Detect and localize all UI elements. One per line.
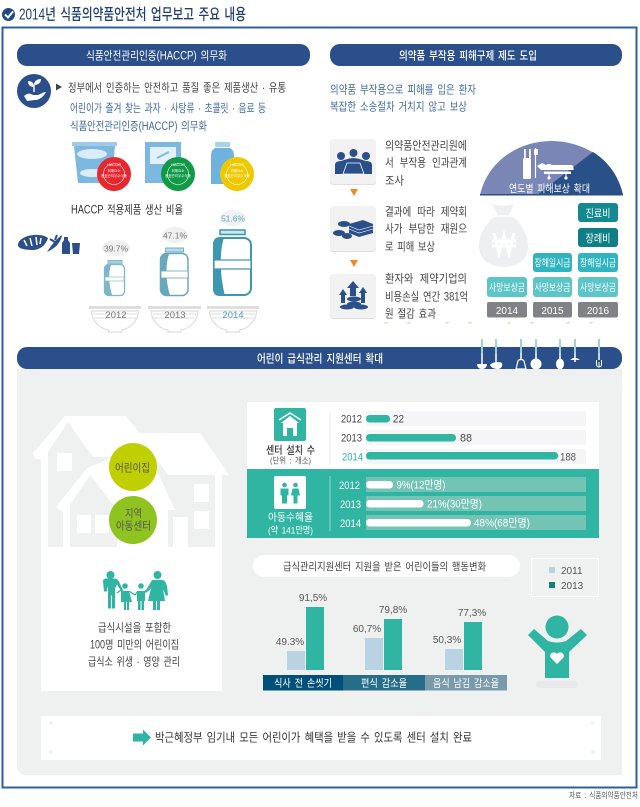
icon: bread, wheat, bottle, cup [18,235,80,254]
step 2 text: 결과에 따라 제약회 [385,204,467,218]
step 2 text: 로 피해 보상 [385,240,435,254]
column 2015: 장해일시금 [534,256,570,270]
callout: conclusion banner [41,716,601,760]
text: daycare description: 급식시설을 포함한 [98,622,171,634]
bar chart: centers: 2014 [342,452,363,464]
bowl 2014 [207,306,259,332]
step 2 text [385,204,467,254]
blue description text: 어린이가 즐겨 찾는 과자 · 사탕류 · 초콜릿 · 음료 등 [70,102,266,115]
jar 2014: 51.6% [221,214,245,224]
chart heading: behaviour change: 급식관리지원센터 지원을 받은 어린이들의 행동변화 [283,561,486,573]
step 1 text: 조사 [385,174,404,188]
column 2015: 2015 [541,306,564,317]
legend: 2011 [561,566,583,577]
heading: relief system: 의약품 부작용 피해구제 제도 도입 [399,50,537,62]
blue description text [70,102,266,133]
blue description text: 식품안전관리인증(HACCP) 의무화 [70,120,207,133]
column 2016: 장해일시금 [580,256,616,270]
step 1 text: 서 부작용 인과관계 [385,156,467,170]
bar chart: beneficiary: 48%(68만명) [474,516,530,530]
panel: daycare house [33,416,229,691]
house illustration [33,416,229,691]
bullet text: 정부에서 인증하는 안전하고 품질 좋은 제품생산 · 유통 [68,80,286,94]
bowl 2012: 2012 [105,310,127,321]
step 3 text: 원 절감 효과 [385,306,436,320]
icon: hospital bed [523,148,574,180]
icon: snack bag with green mark: 위해요소 [172,168,185,173]
title text: 2014년 식품의약품안전처 업무보고 주요 내용 [19,6,246,24]
label: centers: (단위 : 개소) [270,456,311,466]
blue intro text [330,82,476,114]
category labels: 식사 전 손씻기 [274,678,332,690]
icon: family [103,571,168,610]
legend [532,558,598,596]
label: beneficiary: 아동수혜율 [268,512,313,524]
text: daycare description [88,622,180,668]
heading: HACCP [17,44,310,66]
chart: jars HACCP ratio [89,210,259,332]
bars: food waste: 77,3% [458,608,486,619]
bars: food waste [433,608,486,670]
category labels: 음식 남김 감소율 [433,678,499,690]
icon: children [274,476,306,509]
column 2014: 2014 [496,306,519,317]
panel: drug side-effect relief [330,44,623,323]
bar chart: centers [341,411,586,464]
bubble: community child center [109,496,157,544]
bar chart: centers: 88 [460,432,472,444]
icon: check badge [2,8,15,21]
blue intro text: 복잡한 소송절차 거치지 않고 보상 [330,100,467,114]
text: daycare description: 100명 미만의 어린이집 [90,638,179,652]
step 2 icon: coins and bills [330,206,376,252]
bubble: community child center: 아동센터 [116,520,151,532]
jar 2012 [102,240,130,296]
bars: picky eating: 60,7% [353,624,381,635]
panel: HACCP [17,44,310,332]
bowl 2014: 2014 [222,310,244,321]
bar chart: beneficiary [339,477,586,530]
column 2015 [533,253,572,318]
icon: child with heart [528,616,587,688]
column 2014: 사망보상금 [489,282,525,294]
label: centers: 센터 설치 수 [266,444,315,456]
icon: house [274,408,306,441]
category labels [263,675,507,690]
bars: food waste: 50,3% [433,635,461,646]
jar 2014 [213,210,251,296]
panel: child beneficiary rate [247,469,599,538]
icon: bottle with yellow mark: 위해요소 [231,168,244,173]
stacked compensation chart [487,203,618,318]
panel: centers installed [247,402,599,469]
step 1 icon: meeting [330,139,376,185]
step 1 text: 의약품안전관리원에 [385,138,467,152]
bars: handwashing [276,593,327,670]
arrow down 2 [350,260,358,267]
column 2016 [578,203,618,318]
heading: HACCP: 식품안전관리인증(HACCP) 의무화 [86,50,227,62]
label: centers [266,444,315,466]
bowl 2013: 2013 [164,310,186,321]
column 2016: 장례비 [586,232,610,245]
icon: snack bag with green mark: HACCP [171,162,185,167]
bubble: community child center: 지역 [125,507,142,520]
icon: snack bag with green mark [145,142,195,191]
bar chart: centers: 22 [393,414,404,426]
step 3 text: 비용손실 연간 381억 [385,290,468,304]
bar chart: beneficiary: 2014 [340,518,361,530]
icon: bottle with yellow mark [211,142,254,191]
icon: snack container with red mark: 위해요소 [108,168,121,173]
icon: snack bag with green mark: 중점관리우수식품 [165,173,192,178]
column 2014 [487,277,527,318]
icon: hand with sprout [17,74,51,108]
blue intro text: 의약품 부작용으로 피해를 입은 환자 [330,82,476,96]
step 1 text [385,138,467,188]
title [2,6,246,24]
icon: snack container with red mark [72,142,131,191]
step 3 icon: rising arrows and coins [330,274,376,319]
jar 2012: 39.7% [104,244,128,254]
bar chart: beneficiary: 2013 [340,499,361,511]
icon: bottle with yellow mark: 중점관리우수식품 [224,173,251,178]
category labels: 편식 감소율 [361,676,407,690]
step 2 text: 사가 부담한 재원으 [385,222,467,236]
column 2016: 사망보상금 [580,282,616,294]
label: beneficiary [268,512,313,536]
callout: conclusion banner: 박근혜정부 임기내 모든 어린이가 혜택을 받을 수 있도록 센터 설치 완료 [155,730,472,744]
icon: snack container with red mark: 중점관리우수식품 [101,173,128,178]
compensation dome [480,141,623,196]
icon: bottle with yellow mark: HACCP [230,162,244,167]
heading: child meal management [17,339,622,370]
chart heading: behaviour change [253,555,520,577]
icon: arrow [133,730,151,746]
bar chart: beneficiary: 9%(12만명) [396,478,446,492]
text: daycare description: 급식소 위생 · 영양 관리 [88,656,180,668]
bars: handwashing: 91,5% [299,593,327,604]
panel: child meal management background [17,369,622,775]
bars: picky eating: 79,8% [379,605,407,616]
bowl 2012 [89,306,141,332]
bullet text [56,80,286,94]
bubble: daycare [109,443,157,491]
jar 2013 [160,227,188,296]
column 2015: 사망보상금 [534,282,570,294]
column 2016: 진료비 [586,207,610,220]
jar 2013: 47.1% [163,230,187,240]
bar chart: behaviour change [263,593,507,690]
icon: snack container with red mark: HACCP [107,162,121,167]
bar chart: beneficiary: 2012 [339,480,360,492]
bars: picky eating [353,605,407,670]
chart heading: HACCP 적용제품 생산 비율 [71,204,183,216]
icon: money bag [479,204,528,267]
bowl 2013 [148,306,201,332]
bar chart: centers: 188 [560,452,576,464]
bar chart: centers: 2013 [341,432,362,444]
heading: relief system [330,44,622,66]
bar chart: beneficiary: 21%(30만명) [427,498,482,510]
column 2016: 2016 [587,306,610,317]
label: beneficiary: (약 141만명) [268,524,313,536]
step 3 text [385,272,468,320]
compensation dome: 연도별 피해보상 확대 [509,182,590,195]
legend: 2013 [561,581,584,592]
icon: kitchen utensils [477,339,602,370]
step 3 text: 환자와 제약기업의 [385,272,467,286]
bar chart: centers: 2012 [341,414,362,426]
heading: child meal management: 어린이 급식관리 지원센터 확대 [257,352,383,366]
bubble: daycare: 어린이집 [115,462,150,474]
arrow down 1 [350,189,358,196]
bars: handwashing: 49.3% [276,637,304,648]
